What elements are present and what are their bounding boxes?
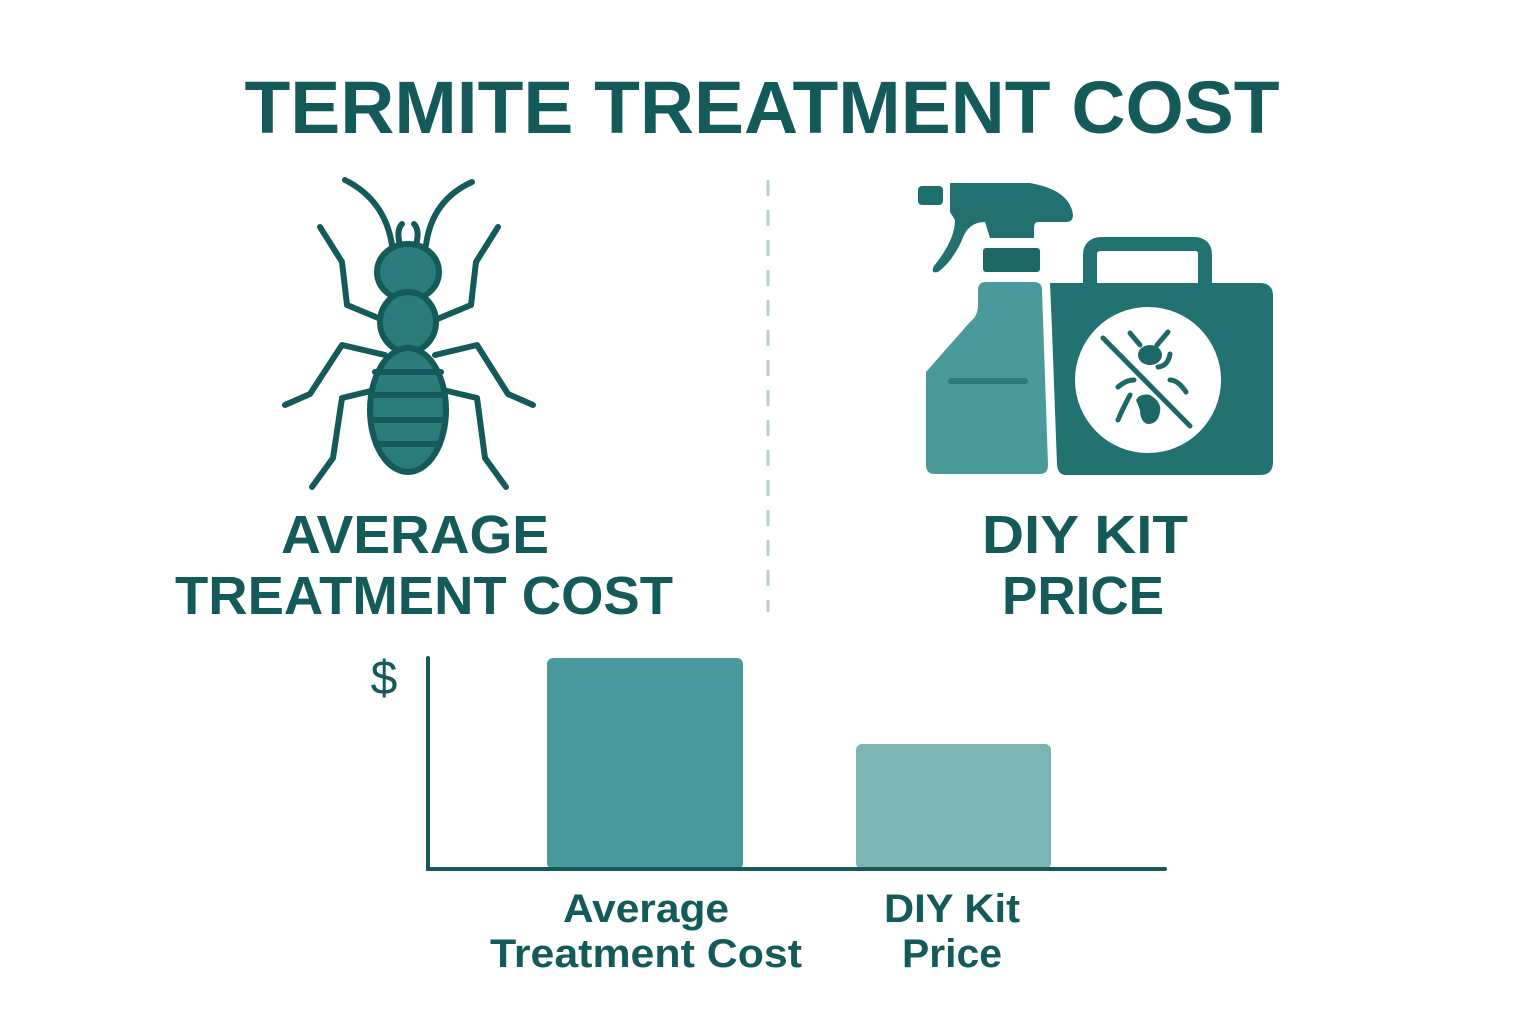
bar chart: Average — [563, 887, 729, 931]
bar chart: Price — [902, 932, 1002, 976]
icon: termite — [285, 180, 533, 487]
bar chart — [371, 652, 1165, 976]
label: average treatment cost: AVERAGE — [281, 505, 549, 565]
label: average treatment cost: TREATMENT COST — [175, 566, 673, 626]
bar chart: Treatment Cost — [490, 932, 802, 976]
label: diy kit price: DIY KIT — [982, 505, 1188, 565]
bar chart: $ — [371, 652, 397, 705]
divider — [766, 180, 770, 612]
bar chart: DIY Kit — [884, 887, 1020, 931]
label: diy kit price — [982, 505, 1188, 626]
icon: spray bottle and kit — [918, 183, 1273, 475]
label: average treatment cost — [175, 505, 673, 626]
title: TERMITE TREATMENT COST — [244, 66, 1280, 149]
label: diy kit price: PRICE — [1002, 566, 1164, 626]
